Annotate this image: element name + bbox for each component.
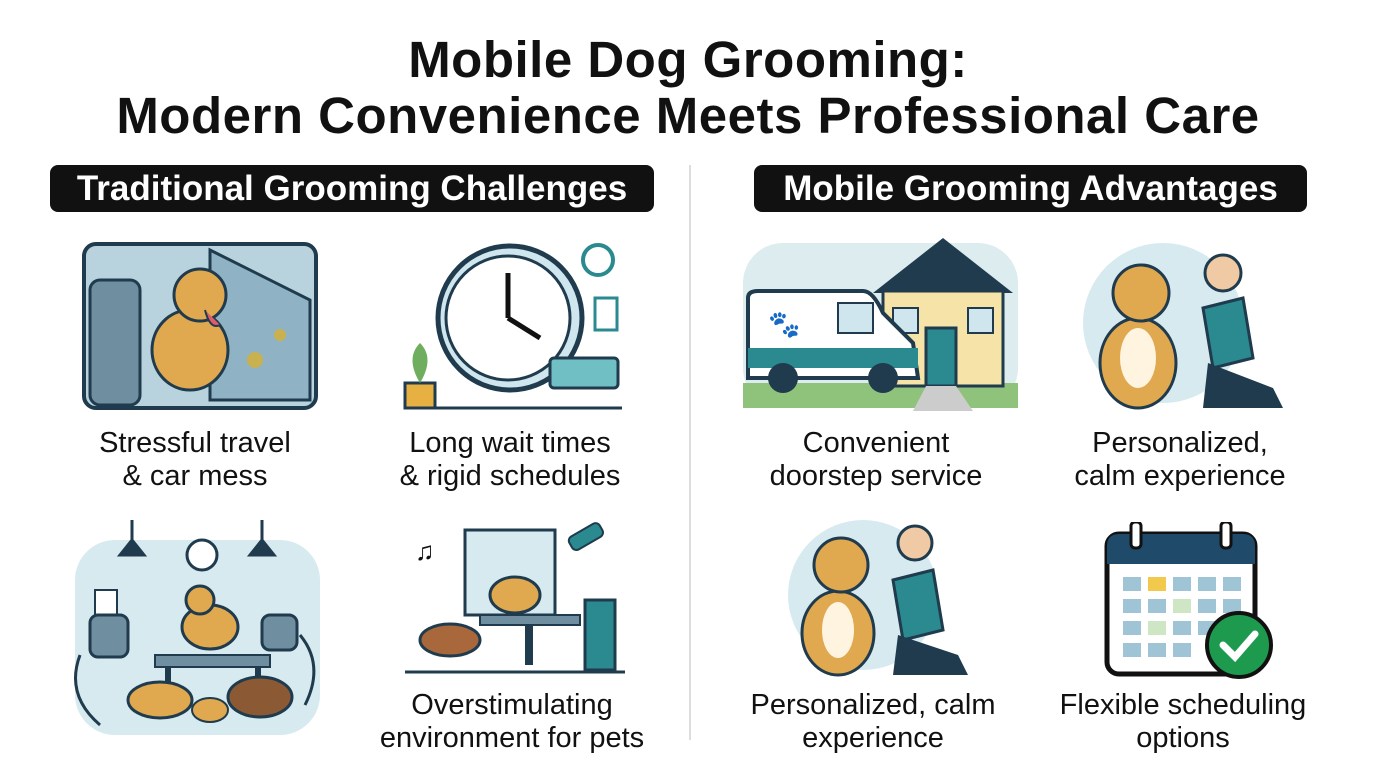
icon: groomer with dog	[1083, 243, 1283, 410]
caption: stressful travel	[99, 427, 291, 492]
title	[116, 31, 1260, 144]
caption: overstimulating: environment for pets	[380, 722, 644, 754]
caption: personalized	[1074, 427, 1286, 492]
caption: flexible scheduling: options	[1136, 722, 1230, 754]
caption: personalized 2	[750, 689, 996, 754]
title: Mobile Dog Grooming:	[408, 31, 968, 88]
caption: doorstep: Convenient	[803, 427, 949, 459]
caption: stressful travel: & car mess	[122, 460, 268, 492]
icon: van and house	[743, 238, 1018, 411]
title: Modern Convenience Meets Professional Care	[116, 87, 1260, 144]
caption: flexible scheduling: Flexible scheduling	[1060, 689, 1306, 721]
caption: long wait: Long wait times	[409, 427, 611, 459]
icon: calendar	[1104, 522, 1273, 679]
caption: long wait	[400, 427, 620, 492]
icon: van and house: 🐾	[768, 309, 800, 339]
caption: overstimulating: Overstimulating	[411, 689, 613, 721]
icon: groomer with dog 2	[788, 520, 968, 676]
caption: stressful travel: Stressful travel	[99, 427, 291, 459]
caption: personalized: calm experience	[1074, 460, 1286, 492]
icon: dog in car	[82, 242, 318, 410]
header: mobile advantages: Mobile Grooming Advantages	[783, 169, 1278, 208]
caption: personalized: Personalized,	[1092, 427, 1268, 459]
icon: grooming table with dogs	[405, 522, 625, 674]
header: traditional challenges: Traditional Grooming Challenges	[77, 169, 627, 208]
caption: doorstep: doorstep service	[770, 460, 982, 492]
caption: flexible scheduling	[1060, 689, 1306, 754]
caption: long wait: & rigid schedules	[400, 460, 620, 492]
caption: personalized 2: experience	[802, 722, 944, 754]
icon: clock and waiting room	[404, 243, 622, 410]
icon: busy salon	[74, 520, 320, 735]
caption: personalized 2: Personalized, calm	[750, 689, 996, 721]
caption: overstimulating	[380, 689, 644, 754]
caption: doorstep	[770, 427, 982, 492]
icon: grooming table with dogs: ♫	[415, 536, 434, 566]
